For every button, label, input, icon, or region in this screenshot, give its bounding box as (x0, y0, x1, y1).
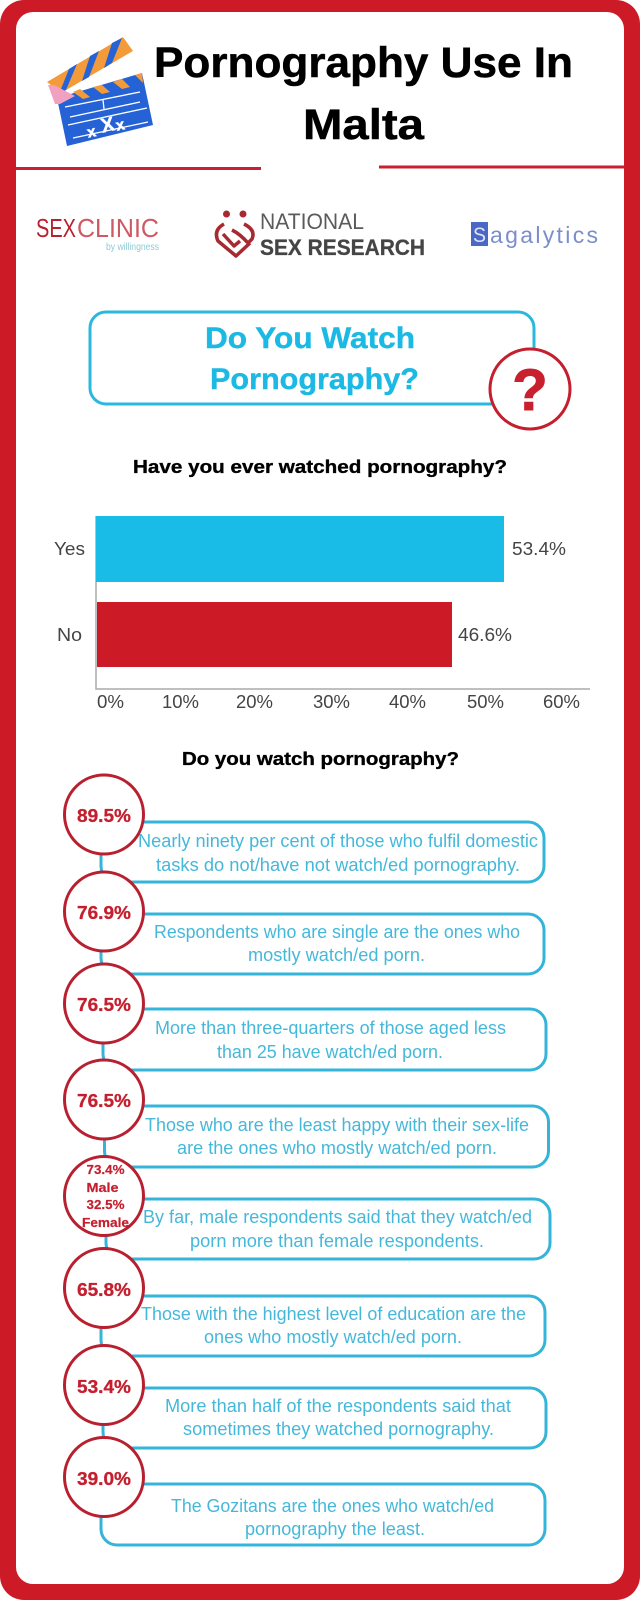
text box: Nearly ninety per cent of those who fulfil domestic (138, 831, 538, 851)
axis tick labels: 50% (467, 692, 504, 712)
axis tick labels: 30% (313, 692, 350, 712)
percentage circle (64, 872, 144, 951)
section banner: Do You Watch Pornography?: Pornography? (210, 363, 419, 396)
title (154, 39, 573, 149)
axis tick labels: 0% (97, 692, 124, 712)
logo: Sex Clinic (36, 213, 159, 253)
percentage circle (64, 964, 144, 1043)
axis tick labels: 10% (162, 692, 199, 712)
bar: No (97, 602, 452, 667)
percentage circle (64, 1346, 144, 1424)
logo: Sex Clinic: CLINIC (77, 213, 159, 243)
logo: Sagalytics: agalytics (490, 222, 598, 248)
section banner: Do You Watch Pornography?: Do You Watch (205, 322, 415, 355)
row: 65.8% education (64, 1248, 545, 1356)
percentage circle: 73.4% (86, 1163, 124, 1177)
text box (103, 1009, 546, 1070)
title: Pornography Use In (154, 39, 573, 87)
percentage circle: 76.9% (77, 903, 131, 923)
percentage circle (64, 1156, 144, 1236)
text box (101, 1296, 545, 1356)
bar labels: 46.6% (458, 625, 512, 645)
title: Malta (303, 101, 425, 149)
text box (106, 1199, 550, 1259)
axis tick labels: 20% (236, 692, 273, 712)
row: 76.5% under 25 (64, 964, 546, 1070)
percentage circle: 53.4% (77, 1377, 131, 1397)
heading: Have you ever watched pornography?: Have you ever watched pornography? (133, 457, 507, 477)
icon: clapperboard (47, 37, 153, 146)
percentage circle: Male (86, 1181, 119, 1195)
text box: More than half of the respondents said that (165, 1396, 511, 1416)
section banner: Do You Watch Pornography? (90, 312, 570, 429)
text box: porn more than female respondents. (190, 1231, 484, 1251)
percentage circle: 89.5% (77, 806, 131, 826)
text box: Respondents who are single are the ones who (154, 922, 520, 942)
logo: National Sex Research (216, 209, 425, 260)
percentage circle (64, 1248, 144, 1328)
percentage circle: 39.0% (77, 1469, 131, 1489)
text box (101, 914, 544, 974)
percentage circle: 65.8% (77, 1280, 131, 1300)
bar: Yes (96, 516, 504, 582)
percentage circle (64, 1060, 144, 1139)
axis tick labels: 40% (389, 692, 426, 712)
row: 53.4% half of respondents (64, 1346, 546, 1448)
row: 89.5% domestic tasks (64, 775, 544, 882)
text box (103, 1388, 546, 1448)
text box: tasks do not/have not watch/ed pornography. (156, 855, 520, 875)
logo: National Sex Research: NATIONAL (260, 209, 364, 234)
text box: sometimes they watched pornography. (183, 1419, 494, 1439)
icon: question mark (490, 349, 570, 429)
percentage circle (64, 775, 144, 854)
row: 76.9% single (64, 872, 544, 974)
text box (101, 822, 544, 882)
bar chart (54, 516, 590, 712)
icon: clapperboard: x (86, 123, 98, 142)
logo: Sagalytics: S (473, 224, 486, 247)
logo: Sex Clinic: by willingness (106, 242, 159, 253)
text box: By far, male respondents said that they watch/ed (143, 1207, 532, 1227)
axis tick labels: 60% (543, 692, 580, 712)
percentage circle: 76.5% (77, 995, 131, 1015)
axis tick labels (97, 692, 580, 712)
bar labels: 53.4% (512, 539, 566, 559)
percentage circle: 76.5% (77, 1091, 131, 1111)
bar labels: No (57, 625, 82, 645)
percentage circle (64, 1438, 144, 1516)
text box: than 25 have watch/ed porn. (217, 1042, 443, 1062)
text box: are the ones who mostly watch/ed porn. (177, 1138, 497, 1158)
icon: question mark: ? (512, 358, 548, 423)
text box: Those with the highest level of education are the (141, 1304, 526, 1324)
bar labels: Yes (54, 539, 85, 559)
text box (104, 1106, 548, 1167)
row: male vs female (64, 1156, 550, 1259)
icon: clapperboard: X (99, 113, 117, 138)
row: 76.5% least happy (64, 1060, 548, 1167)
text box: pornography the least. (245, 1519, 425, 1539)
heading: Do you watch pornography?: Do you watch pornography? (182, 749, 459, 769)
percentage circle: 32.5% (86, 1198, 124, 1212)
text box: The Gozitans are the ones who watch/ed (171, 1496, 494, 1516)
logo: National Sex Research: SEX RESEARCH (260, 235, 425, 260)
text box: ones who mostly watch/ed porn. (204, 1327, 462, 1347)
header divider left and right (16, 166, 624, 170)
text box (101, 1484, 545, 1545)
logo: Sex Clinic: SEX (36, 213, 76, 243)
row: 39.0% Gozitans (64, 1438, 545, 1545)
bar labels (54, 539, 566, 645)
text box: mostly watch/ed porn. (248, 945, 425, 965)
text box: More than three-quarters of those aged less (155, 1018, 506, 1038)
text box: Those who are the least happy with their sex-life (145, 1115, 529, 1135)
icon: clapperboard: x (114, 116, 127, 135)
percentage circle: Female (82, 1216, 129, 1230)
